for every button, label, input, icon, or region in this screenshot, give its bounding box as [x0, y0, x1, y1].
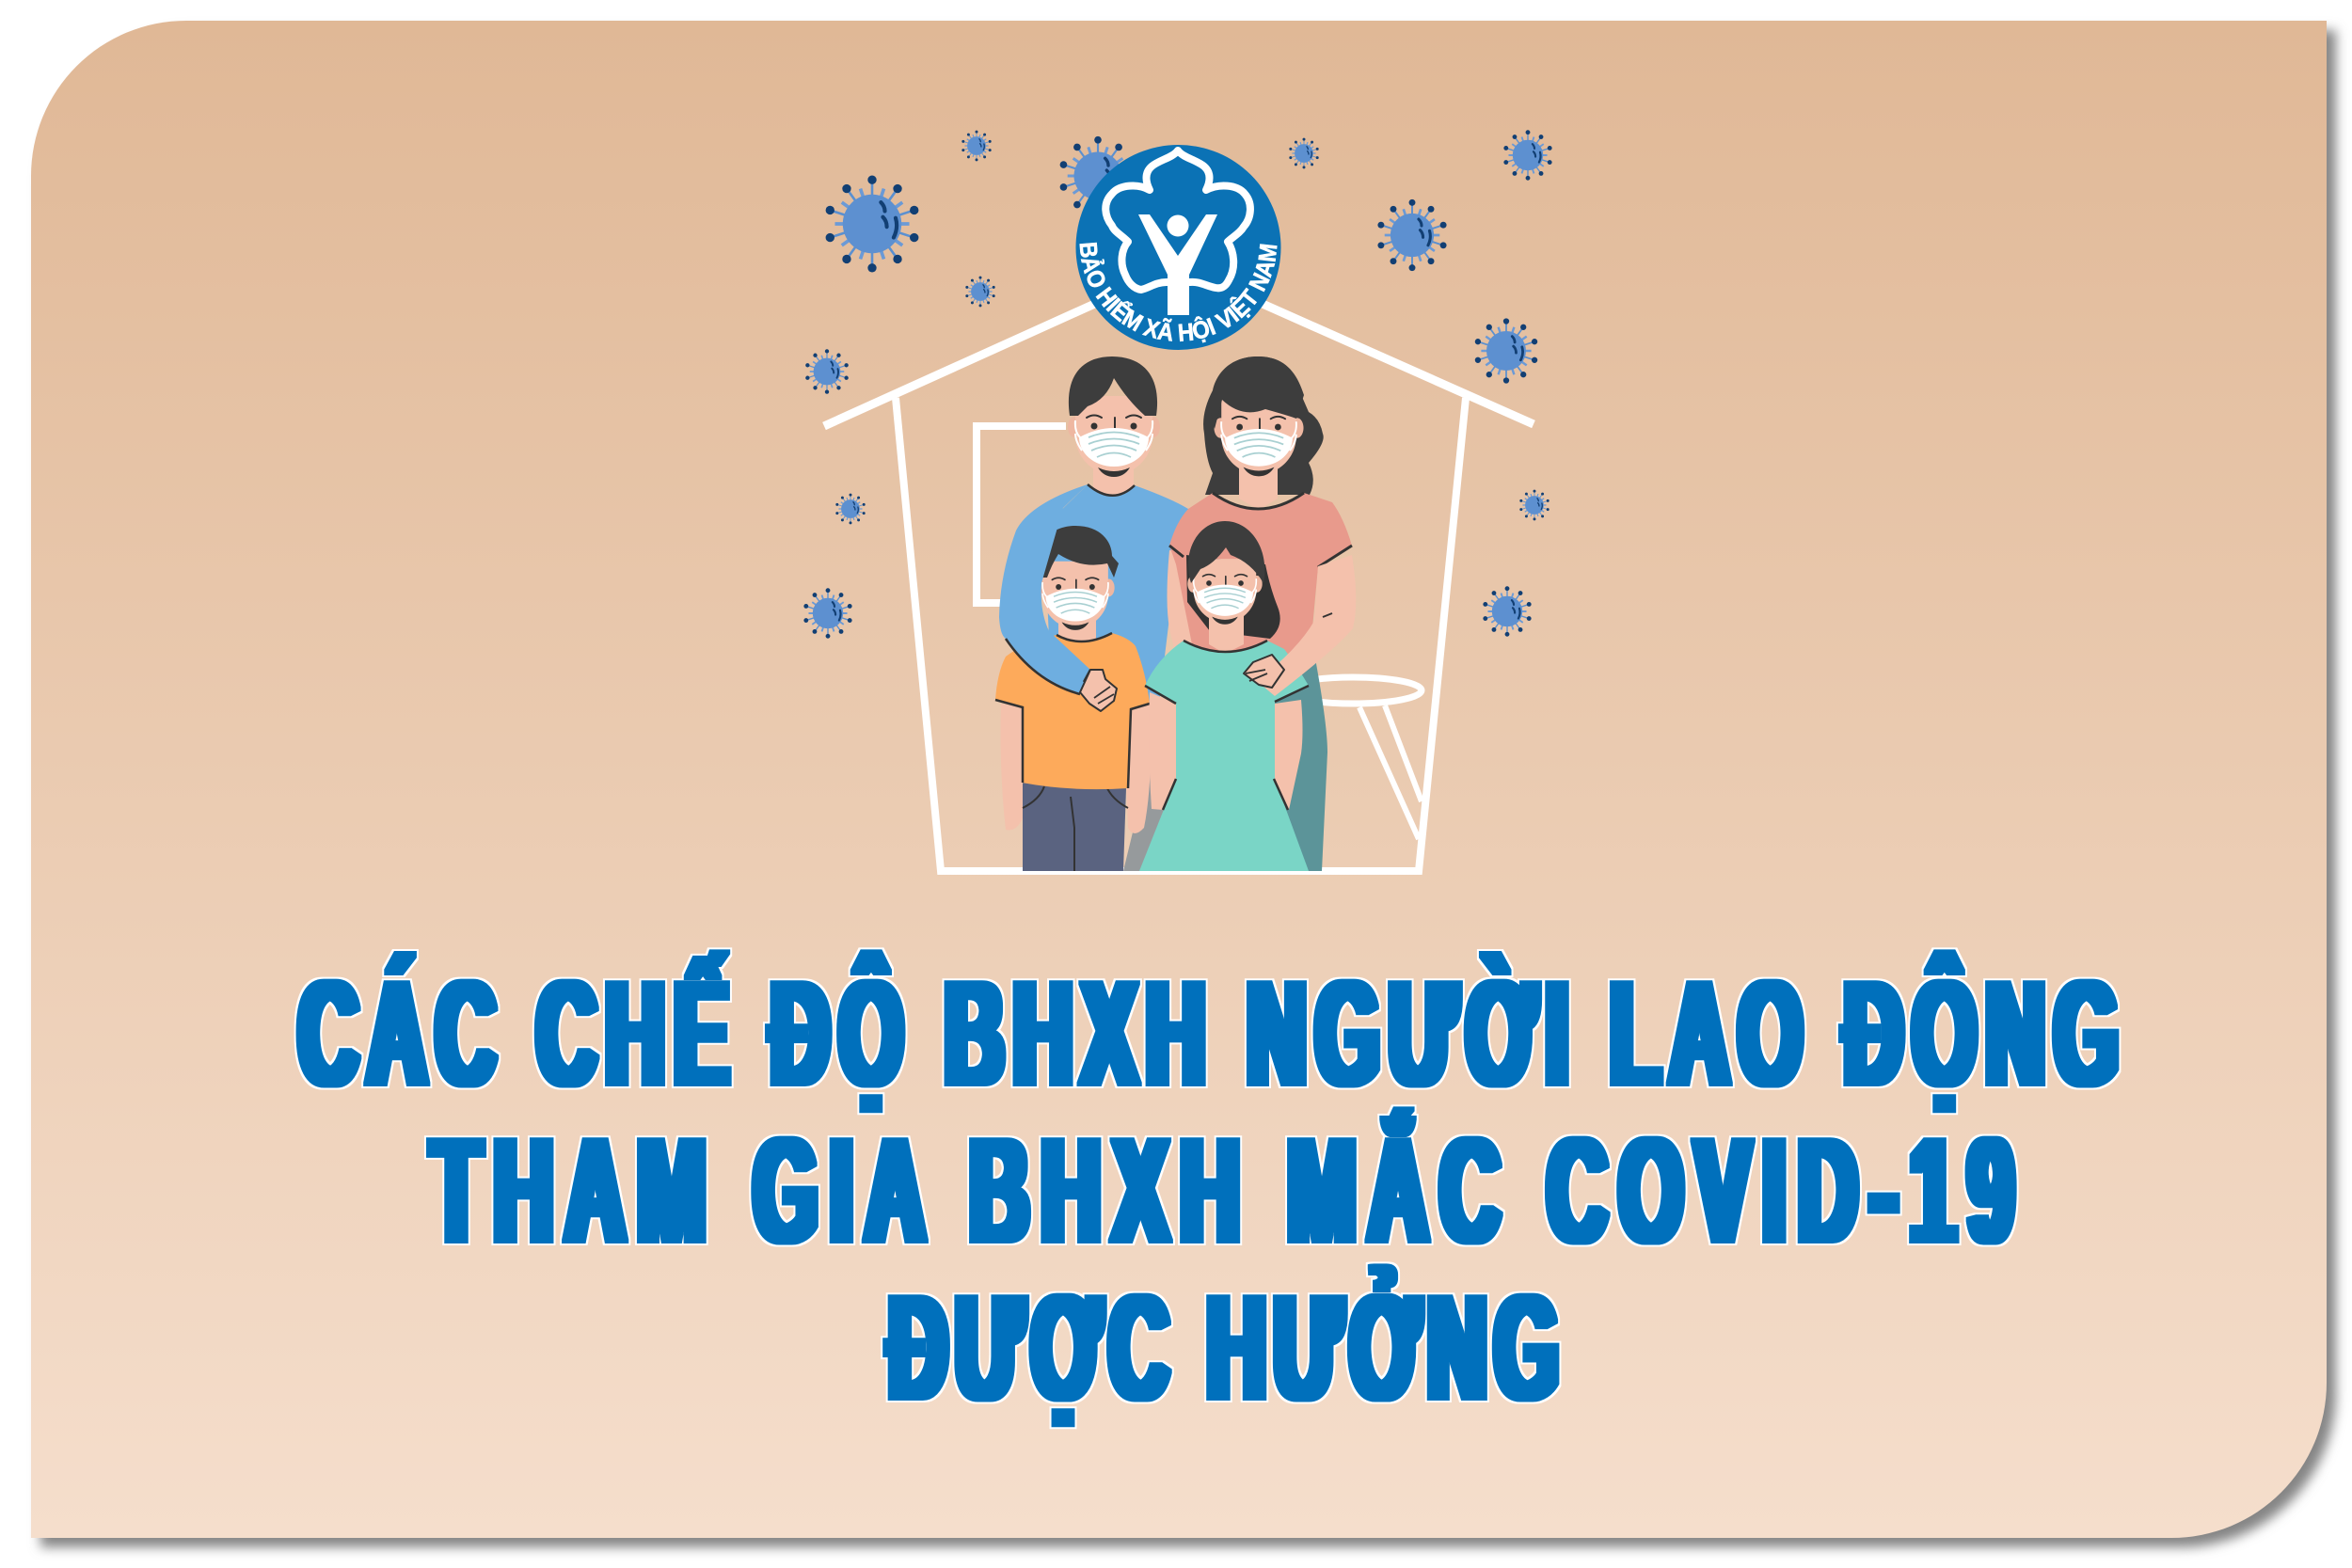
icon: virus 5 — [826, 176, 918, 272]
title line 3: ĐƯỢC HƯỞNG — [888, 1264, 1558, 1432]
icon: virus 11 — [1519, 490, 1549, 520]
title line 1: CÁC CHẾ ĐỘ BHXH NGƯỜI LAO ĐỘNG — [299, 950, 2118, 1117]
icon: woman's hand — [1244, 655, 1284, 688]
family illustration — [995, 356, 1356, 871]
girl — [1139, 521, 1309, 871]
house outline with window and stool — [824, 266, 1534, 871]
woman's arm over the girl's shoulder — [1244, 555, 1356, 696]
logo: Bảo hiểm xã hội Việt Nam: BẢO HIỂM XÃ HỘI VIỆT NAM — [1079, 243, 1278, 342]
icon: virus 12 — [803, 588, 852, 639]
viruses around the house — [803, 130, 1552, 639]
man — [1044, 356, 1197, 734]
icon: virus 4 — [1503, 130, 1552, 181]
title line 2: THAM GIA BHXH MẮC COVID-19 — [431, 1106, 2013, 1275]
icon: virus 10 — [835, 494, 866, 524]
woman skirt and man trousers behind children — [1123, 654, 1327, 871]
icon: virus 13 — [1483, 586, 1532, 637]
logo flower emblem — [1105, 150, 1250, 315]
icon: virus 1 — [961, 131, 992, 161]
logo ring text — [1080, 243, 1277, 341]
man's arm around the boy — [999, 484, 1117, 711]
logo: Bảo hiểm xã hội Việt Nam — [1076, 145, 1281, 350]
title — [299, 950, 2118, 1432]
icon: virus 9 — [805, 349, 849, 394]
icon: virus 2 — [1060, 136, 1136, 215]
icon: virus 7 — [965, 277, 995, 307]
woman — [1167, 356, 1352, 677]
icon: man's hand — [1080, 670, 1117, 711]
icon: virus 6 — [1377, 199, 1447, 271]
boy — [995, 526, 1151, 871]
icon: virus 8 — [1475, 318, 1537, 384]
icon: virus 3 — [1289, 138, 1319, 168]
